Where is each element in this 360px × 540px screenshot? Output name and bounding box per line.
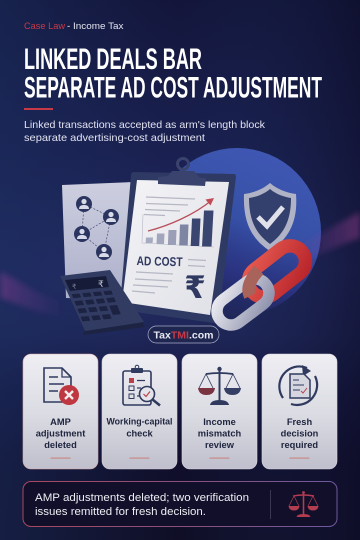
icon: checklist with magnifier [123, 365, 160, 406]
card label: review [205, 440, 235, 450]
card label: AMP [50, 417, 71, 427]
calculator: ₹ [98, 280, 104, 290]
category label: Case Law [24, 20, 65, 31]
icon: balance scale [198, 367, 241, 405]
panel: income mismatch review [182, 354, 257, 469]
shield [244, 183, 296, 251]
category label [24, 20, 124, 31]
icon: person node 4 [96, 244, 112, 260]
panel: working-capital check [102, 354, 177, 469]
chain link [211, 240, 312, 331]
subtitle [24, 120, 266, 144]
card label [36, 417, 85, 450]
card label: Income [203, 417, 236, 427]
title [24, 43, 322, 104]
bar chart [142, 198, 214, 247]
card label: decision [281, 428, 319, 438]
panel: AMP adjustment deleted [23, 354, 98, 469]
panel: network document [62, 182, 134, 300]
ad cost label: AD COST [136, 254, 183, 269]
callout: conclusion [23, 482, 337, 526]
red link [242, 240, 312, 303]
card label: deleted [44, 440, 77, 450]
icon: deleted document [44, 368, 79, 405]
callout text: issues remitted for fresh decision. [35, 506, 206, 518]
card label [106, 416, 172, 438]
link overlap [249, 270, 259, 296]
title rule [24, 108, 53, 110]
icon: refresh document [279, 365, 317, 405]
card label: required [281, 440, 318, 450]
clipboard clip [158, 158, 206, 186]
category label: - Income Tax [67, 20, 124, 31]
brand badge: TaxTMI.com [154, 330, 213, 342]
illustration [60, 158, 312, 343]
calculator [60, 270, 145, 335]
panel: fresh decision required [262, 354, 337, 469]
title: LINKED DEALS BAR [24, 43, 202, 76]
callout text [35, 492, 249, 518]
calculator: ₹ [72, 283, 77, 291]
subtitle: separate advertising-cost adjustment [24, 133, 205, 144]
card label: adjustment [36, 428, 85, 438]
card label [198, 417, 242, 450]
silver link [211, 273, 275, 331]
icon: person node 3 [74, 226, 90, 242]
icon: red scale [288, 491, 318, 517]
clipboard [120, 158, 236, 323]
icon: person node 1 [76, 196, 92, 212]
card label: Working-capital [106, 416, 172, 426]
icon: person node 2 [103, 209, 119, 225]
brand badge [148, 326, 219, 343]
card label: mismatch [198, 428, 242, 438]
card label: Fresh [287, 417, 312, 427]
callout text: AMP adjustments deleted; two verification [35, 492, 249, 504]
rupee symbol: ₹ [184, 270, 206, 306]
subtitle: Linked transactions accepted as arm's length block [24, 120, 266, 131]
card label: check [126, 428, 154, 438]
card label [281, 417, 319, 450]
